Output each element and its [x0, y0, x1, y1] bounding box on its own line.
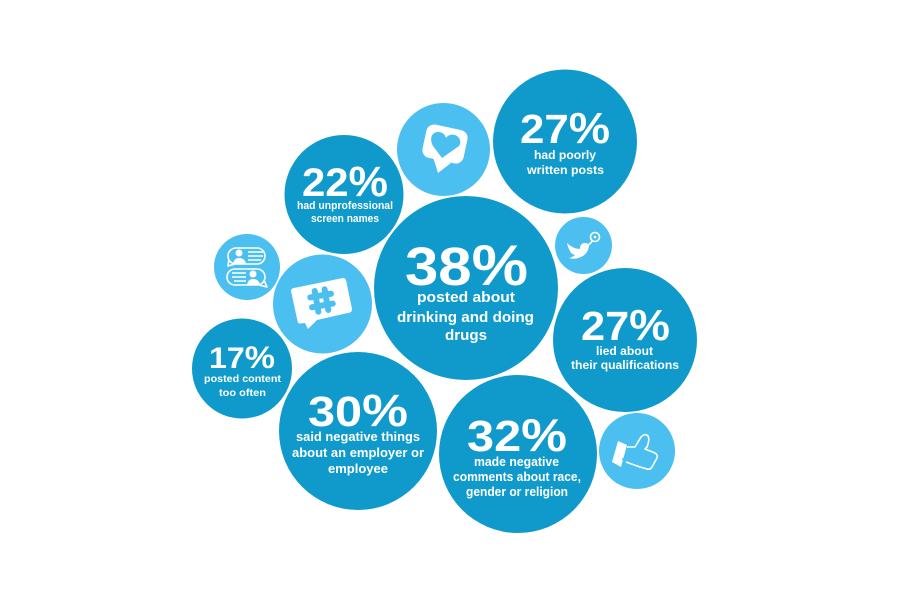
stat bubble: 38%: posted about — [417, 289, 515, 306]
stat bubble: 22%: screen names — [311, 213, 379, 225]
stat bubble: 27% poorly written posts: had poorly — [534, 148, 596, 162]
stat bubble: 38% — [374, 196, 558, 380]
stat bubble: 17% — [192, 318, 292, 418]
icon: twitter bird — [555, 217, 612, 274]
stat bubble: 32%: comments about race, — [453, 470, 581, 484]
stat bubble: 38%: drinking and doing — [397, 309, 534, 326]
stat bubble: 30%: employee — [328, 462, 388, 476]
stat bubble: 30%: about an employer or — [292, 446, 424, 460]
stat bubble: 32%: gender or religion — [466, 485, 568, 499]
stat bubble: 27% lied about qualifications: 27% — [581, 302, 670, 350]
stat bubble: 17%: too often — [219, 387, 266, 399]
stat bubble: 22%: had unprofessional — [297, 200, 393, 212]
stat bubble: 38%: drugs — [445, 327, 487, 344]
stat bubble: 27% poorly written posts — [493, 70, 637, 214]
stat bubble: 32%: 32% — [467, 409, 567, 461]
stat bubble: 22% — [284, 135, 404, 254]
icon: heart speech bubble — [397, 103, 490, 196]
stat bubble: 38%: 38% — [405, 234, 528, 298]
icon: user chat bubbles — [214, 234, 280, 300]
stat bubble: 27% lied about qualifications: lied about — [596, 344, 653, 358]
stat bubble: 32%: made negative — [474, 455, 559, 469]
stat bubble: 27% lied about qualifications: their qualifications — [571, 358, 679, 372]
stat bubble: 22%: 22% — [302, 158, 388, 205]
stat bubble: 17%: posted content — [204, 373, 282, 385]
icon: hashtag speech bubble — [273, 254, 372, 354]
stat bubble: 27% lied about qualifications — [553, 268, 697, 412]
stat bubble: 30% — [279, 352, 437, 510]
stat bubble: 30%: 30% — [308, 385, 408, 436]
stat bubble: 32% — [439, 375, 597, 533]
stat bubble: 17%: 17% — [209, 339, 275, 375]
stat bubble: 27% poorly written posts: 27% — [520, 105, 610, 153]
icon: thumbs up — [599, 413, 675, 489]
stat bubble: 27% poorly written posts: written posts — [526, 163, 604, 177]
stat bubble: 30%: said negative things — [296, 430, 420, 444]
